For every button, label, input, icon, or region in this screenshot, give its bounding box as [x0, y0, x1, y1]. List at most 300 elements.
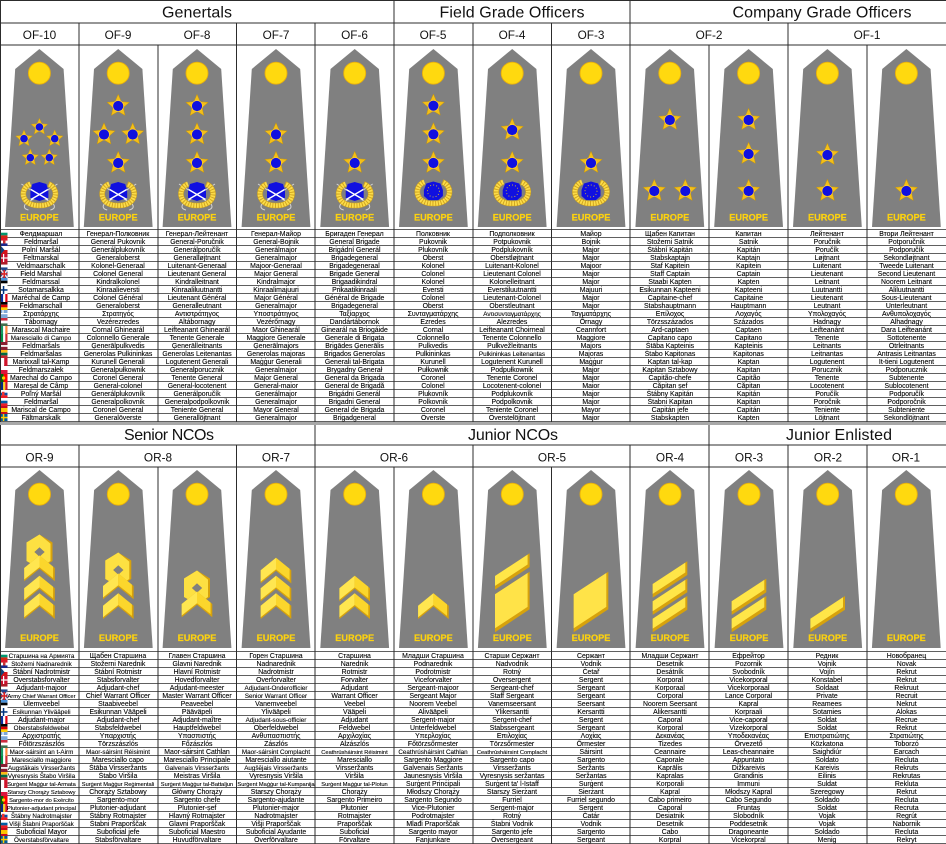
names: OR-8 left: Plutonier-adjudant	[90, 805, 146, 812]
names: OR-9: Army Chief Warrant Officer	[8, 694, 76, 700]
names: OF-2 left: Štábní Kapitán	[647, 245, 693, 254]
names: OF-1 right: Tweede Luitenant	[879, 263, 934, 270]
names: OR-1: Toborzó	[894, 741, 919, 748]
names: OF-6: Brigadni General	[329, 399, 381, 406]
names: OR-7: Ylivääpeli	[261, 709, 291, 716]
names: OR-5 right: Λοχίας	[581, 732, 602, 740]
names: OR-8 right: Υπασπιστής	[178, 733, 217, 740]
names: OF-9: Kurunell Ġenerali	[91, 357, 145, 366]
names: OF-4: Lieutenant-Colonel	[483, 295, 541, 302]
names: OF-2 left: Štabni Kapitan	[648, 397, 693, 406]
names: OF-3: Majuuri	[580, 287, 603, 294]
names: OF-1 left: Leitnants	[813, 343, 842, 350]
names: OF-1 left: Porucznik	[812, 367, 843, 374]
names: OF-10: Veldmaarschalk	[17, 263, 66, 270]
names: OF-10: Feldmaršal	[24, 399, 59, 406]
insignia: OR-5 left: EUROPE	[493, 633, 532, 643]
names: OF-10: Marixxall tal-Kamp	[13, 359, 70, 366]
insignia: OR-4	[636, 470, 704, 648]
names: OF-3: Mayor	[581, 407, 601, 414]
names: OF-10: Fältmarskalk	[21, 415, 61, 422]
insignia: OF-2 right: EUROPE	[729, 212, 768, 222]
names: OF-3: Őrnagy	[580, 317, 603, 326]
names: OF-10: Maréchal de Camp	[12, 295, 70, 302]
names: OF-3: Majoras	[579, 351, 604, 358]
names: OR-3: Kapral	[739, 701, 759, 708]
names: OR-6 right: Sargento Segundo	[404, 797, 462, 804]
names: OF-6: Бригаден Генерал	[325, 231, 384, 238]
heading: Field Grade Officers: Field Grade Officers	[440, 4, 584, 22]
names: OR-6 left: Viršila	[345, 773, 364, 780]
names: OR-9: Surġent Maġġur tal-Armata	[7, 782, 77, 788]
names: OF-1 left: Logutenent	[810, 359, 844, 366]
names: OR-8 left: Štábny Rotmajster	[90, 811, 147, 820]
names: OR-7: Nadrotmistr	[258, 669, 295, 676]
names: OF-7: Kindralmajor	[257, 279, 296, 286]
names: OR-1: Recluta	[895, 757, 918, 764]
names: OR-7: Adjudant-sous-officier	[246, 717, 306, 724]
names: OF-7: Major General	[254, 271, 298, 278]
names: OR-3: Őrvezető	[735, 739, 763, 748]
names: OR-6 left: Virsseržants	[336, 765, 374, 772]
names: OF-8: Tenente Generale	[170, 335, 225, 342]
names: OF-6: Ginearál na Briogáide	[321, 327, 388, 334]
names: OF-9: Colonel General	[93, 271, 143, 278]
rank labels: officers: OF-7	[263, 28, 289, 42]
names: OF-2 right: Százados	[733, 319, 764, 326]
names: OF-2 right: Kapitein	[736, 263, 761, 270]
names: OR-2: Επιστρατιώτης	[804, 732, 850, 740]
names: OF-3: Majors	[581, 343, 602, 350]
names: OF-8: Tenente General	[172, 375, 223, 382]
names: OR-3: Vice-caporal	[729, 717, 768, 724]
insignia: OR-5 right	[557, 470, 625, 648]
names: OR-3: Lance Corporal	[725, 693, 773, 700]
insignia: OF-3	[557, 49, 625, 227]
names: OR-9: Oberstabsfeldwebel	[14, 725, 69, 732]
names: OF-2 right: Λοχαγός	[735, 310, 762, 318]
names: OF-1 right: Podporučík	[889, 391, 924, 398]
names: OR-5 right: Сержант	[577, 653, 606, 660]
names: OF-9: Kolonel-Generaal	[91, 263, 145, 270]
rank labels: officers: OF-5	[420, 28, 447, 42]
names: OR-6 left: Veebel	[344, 701, 366, 708]
names: OF-8: Generolas Leitenantas	[162, 351, 232, 358]
names: OR-5 right: Furriel segundo	[567, 797, 615, 804]
names: OF-3: Major	[582, 415, 600, 422]
names: OF-2 right: Capitão	[737, 375, 761, 382]
names: OR-8 left: Surġent Maġġur Reġimentali	[82, 782, 154, 788]
names: OR-7: Starszy Chorąży	[251, 789, 302, 796]
flags: officers table	[1, 230, 8, 421]
names: OF-2 right: Captain	[737, 271, 761, 278]
insignia: OR-2	[793, 470, 862, 648]
names: OF-6: Brigadegeneral	[331, 303, 378, 310]
names: OF-9: Generaloberst	[96, 255, 140, 262]
names: OF-9: Generalöverste	[94, 415, 142, 422]
names: OR-7: Sargento-ajudante	[248, 797, 305, 804]
names: OR-4: Korporali	[656, 781, 684, 788]
names: OF-3: Majoor	[580, 263, 602, 270]
names: OF-2 right: Satnik	[739, 239, 759, 246]
names: OF-5: Ezredes	[420, 319, 446, 326]
names: OR-4: Desiatnik	[656, 813, 685, 820]
names: OF-2 left: Törzsszázados	[647, 319, 694, 326]
names: OR-3: Ефрейтор	[732, 652, 765, 660]
insignia: OF-5: EUROPE	[414, 212, 453, 222]
names: OR-5 right: Sargento	[577, 757, 605, 764]
names: OF-10: Tábornagy	[25, 319, 58, 326]
names: OF-7: Генерал-Майор	[251, 230, 301, 238]
names: OF-10: Feldmaršal	[24, 239, 59, 246]
names: OF-5: Överste	[421, 414, 445, 422]
names: OF-1 right: Otrleitnants	[889, 343, 925, 350]
names: OR-1: Recruit	[896, 693, 917, 700]
insignia: OR-5 left	[478, 470, 547, 648]
names: OR-8 left: Sargento-mor	[97, 797, 140, 804]
names: OF-7: Generolas majoras	[247, 351, 306, 358]
names: OR-6 left: Rotmistr	[342, 669, 368, 676]
rank labels: officers: OF-3	[578, 28, 605, 42]
heading: Senior NCOs: Senior NCOs	[124, 427, 214, 444]
names: OR-6 left: Alzászlós	[340, 741, 370, 748]
insignia: OR-6 left: EUROPE	[335, 633, 374, 643]
names: OR-1: Recruta	[894, 805, 919, 812]
rank labels: other ranks: OR-6	[380, 450, 409, 464]
names: OF-1 right: Sekondlöjtnant	[884, 415, 929, 422]
names: OR-3: Vicekorporaal	[727, 685, 770, 692]
names: OR-6 right: Podnarednik	[414, 661, 453, 668]
names: OR-6 left: Adjudant	[341, 717, 368, 724]
names: OR-6 left: Adjudant	[341, 685, 368, 692]
names: OR-5 left: Ceathrúsháirsint Complacht	[477, 750, 548, 756]
names: OR-6 left: Sargento Primeiro	[327, 797, 382, 804]
names: OF-7: Maor Ghinearál	[252, 327, 300, 334]
names: OF-7: Generalmajor	[255, 303, 298, 310]
names: OF-10: Sotamarsalkka	[18, 287, 64, 294]
insignia: OF-3: EUROPE	[572, 212, 610, 222]
names: OF-6: Ġenerali tal-Brigata	[325, 357, 384, 366]
rank labels: officers: OF-4	[499, 28, 526, 42]
names: OF-2 left: Kapitan Sztabowy	[642, 367, 698, 374]
names: OF-1 left: Locotenent	[810, 383, 844, 390]
names: OR-8 left: Törzszászlós	[98, 741, 139, 748]
names: OR-1: Recluta	[895, 829, 918, 836]
names: OR-2: Vojak	[819, 821, 836, 828]
names: OR-6 left: Förvaltare	[339, 837, 370, 844]
insignia: OR-7: EUROPE	[257, 633, 295, 643]
names: OR-7: Nadrotmajster	[254, 813, 298, 820]
names: OR-8 right: Główny Chorąży	[172, 789, 223, 796]
rank labels: other ranks: OR-1	[892, 450, 920, 464]
names: OF-2 left: Kaptan tal-kap	[648, 359, 692, 366]
names: OF-1 left: Lieutenant	[811, 295, 843, 302]
names: OR-8 left: Chorąży Sztabowy	[89, 789, 147, 796]
names: OR-5 left: Rotný	[503, 669, 522, 676]
names: OR-5 right: Vodnik	[581, 821, 602, 828]
names: OF-5: Pulkininkas	[416, 351, 451, 358]
names: OR-6 right: Mlađi Praporščak	[406, 821, 460, 828]
names: OR-3: Cabo Segundo	[726, 797, 772, 804]
names: OF-10: Maresciallo di Campo	[11, 335, 72, 342]
names: OR-5 right: Sergeant	[577, 725, 605, 732]
names: OR-7: Suboficial Ayudante	[246, 829, 306, 836]
names: OR-4: Cabo primeiro	[648, 797, 692, 804]
names: OF-4: Podplukovník	[491, 391, 533, 398]
names: OF-2 right: Kaptan	[738, 359, 760, 366]
names: OF-3: Maggiore	[577, 335, 606, 342]
names: OR-6 right: Unterfeldwebel	[410, 725, 456, 732]
names: OR-8 left: Chief Warrant Officer	[86, 693, 151, 700]
names: OF-10: Poľný Maršál	[21, 391, 62, 398]
names: OR-8 right: Glavni Praporščak	[169, 821, 226, 828]
names: OF-9: Coronel General	[93, 375, 144, 382]
names: OR-8 right: Maor-sáirsint Cathlan	[164, 749, 230, 756]
names: OR-5 left: Starszy Sierżant	[487, 789, 537, 796]
names: OR-5 left: Ylikersantti	[495, 709, 529, 716]
names: OR-7: Горен Старшина	[249, 653, 303, 660]
names: OR-4: Corporal	[657, 693, 684, 700]
names: OR-3: Młodszy Kapral	[725, 789, 773, 796]
names: OF-2 right: Capitán	[737, 407, 761, 414]
rank labels: other ranks: OR-2	[814, 450, 842, 464]
names: OR-5 right: Sergent	[579, 805, 603, 812]
names: OR-8 left: Maor-sáirsint Réisimint	[86, 749, 150, 756]
names: OR-3: Vizekorporal	[729, 725, 768, 732]
names: OF-6: General da Brigada	[325, 375, 385, 382]
names: OR-1: Earcach	[894, 749, 919, 756]
names: OR-5 left: Vanemseersant	[488, 701, 536, 708]
names: OR-9: Főtörzszászlós	[19, 741, 65, 748]
names: OF-7: Generálmajor	[255, 391, 298, 398]
names: OF-1 right: It-tieni Logutenent	[879, 359, 934, 366]
names: OR-4: Korporal	[657, 725, 683, 732]
names: OF-6: Brigade General	[329, 271, 380, 278]
names: OR-8 right: Surġent Maġġur tal-Battaljun	[161, 782, 233, 788]
names: OR-6 right: Noorem Veebel	[409, 701, 457, 708]
names: OR-8 left: Suboficial jefe	[97, 829, 140, 836]
names: OF-5: Pulkvedis	[418, 343, 448, 350]
names: OR-7: Surġent Maġġur tal-Kumpanija	[237, 782, 315, 788]
names: OF-1 left: Løjtnant	[815, 255, 840, 262]
insignia: OR-1: EUROPE	[887, 633, 926, 643]
names: OF-10: Marechal do Campo	[10, 375, 72, 382]
names: OR-9: Plutonier-adjudant principal	[7, 806, 76, 812]
names: OF-1 right: Втори Лейтенант	[879, 230, 935, 238]
insignia: OF-4: EUROPE	[493, 212, 532, 222]
names: OF-3: Bojnik	[582, 239, 601, 246]
rank labels: other ranks: OR-7	[262, 450, 290, 464]
names: OR-1: Rekryt	[897, 837, 917, 844]
names: OR-6 right: Sergeant Major	[409, 693, 457, 700]
names: OR-2: Konstabel	[812, 677, 843, 684]
insignia: OR-9: EUROPE	[20, 633, 59, 643]
insignia: OR-9	[5, 470, 74, 648]
insignia: OR-8 right	[163, 470, 231, 648]
names: OF-3: Major	[582, 247, 600, 254]
names: OR-8 left: Staabiveebel	[98, 701, 138, 708]
names: OF-6: Général de Brigade	[325, 295, 385, 302]
names: OF-4: Pulkininkas Leitenantas	[479, 351, 545, 358]
names: OR-9: Αρχιστρατής	[22, 733, 61, 740]
rank labels: officers: OF-6	[341, 28, 368, 42]
names: OR-4: Kapral	[660, 789, 680, 796]
names: OF-1 left: Poročnik	[814, 399, 841, 406]
names: OF-8: Генерал-Лейтенант	[166, 230, 229, 238]
names: OF-5: Συνταγματάρχης	[408, 310, 459, 318]
names: OR-7: Ανθυπασπιστής	[252, 733, 301, 740]
names: OF-2 left: Štabo Kapitonas	[645, 349, 696, 358]
names: OF-2 left: Capitán jefe	[652, 407, 689, 414]
names: OR-1: Alokas	[896, 709, 917, 716]
names: OR-7: Vyresnysis Viršila	[249, 773, 303, 780]
names: OF-2 right: Kapten	[738, 415, 760, 422]
names: OR-1: Regrút	[896, 813, 917, 820]
names: OF-6: Generale di Brigata	[325, 335, 384, 342]
names: OR-2: Soldado	[814, 829, 840, 836]
names: OR-8 left: Υπαρχιστής	[100, 733, 137, 740]
names: OR-5 right: Sargento	[577, 829, 605, 836]
insignia: OR-7	[242, 470, 310, 648]
names: OF-8: Logutenent Ġenerali	[166, 357, 229, 366]
names: OF-9: Kinraalieversti	[96, 287, 140, 294]
names: OF-6: Brigadegeneral	[331, 255, 378, 262]
rank labels: other ranks: OR-5	[538, 450, 567, 464]
names: OF-1 left: Lieutenant	[811, 271, 843, 278]
names: OF-6: Brygadny Generał	[327, 367, 383, 374]
names: OR-6 right: Fanjunkare	[416, 837, 450, 844]
names: OR-2: Soldat	[817, 725, 837, 732]
names: OR-4: Cabo	[662, 829, 678, 836]
names: OF-5: Kolonel	[422, 263, 445, 270]
names: OF-1 left: Hadnagy	[813, 319, 841, 326]
insignia: OF-1 left: EUROPE	[808, 212, 847, 222]
heading: Junior Enlisted: Junior Enlisted	[786, 427, 892, 444]
names: OF-2 left: Stabskaptajn	[650, 255, 690, 262]
names: OF-2 left: Esikunnan Kapteeni	[639, 287, 701, 294]
names: OF-10: Feldmarschall	[20, 303, 63, 310]
names: OF-2 right: Căpitan	[737, 383, 761, 390]
names: OF-4: Potpukovnik	[493, 239, 531, 246]
names: OF-8: Luitenant-Generaal	[168, 263, 227, 270]
names: OF-9: Generalpułkownik	[91, 367, 146, 374]
names: OF-6: Brigadegeneraal	[329, 263, 380, 270]
names: OF-4: Lieutenant Colonel	[483, 271, 541, 278]
names: OR-6 left: Vääpeli	[343, 709, 366, 716]
names: OF-3: Майор	[580, 230, 602, 238]
names: OR-5 left: Sergeant-chef	[490, 685, 534, 692]
names: OF-7: Mayor General	[253, 407, 299, 414]
names: OF-1 left: Leutnant	[814, 303, 840, 310]
names: OR-4: Korporaal	[655, 685, 685, 692]
names: OR-7: Višji Praporščak	[251, 821, 301, 828]
names: OF-7: Generálmajor	[255, 247, 298, 254]
names: OR-5 left: Furriel	[502, 797, 522, 804]
names: OR-6 left: Maresciallo	[337, 757, 372, 764]
names: OR-5 left: Oversergent	[493, 677, 531, 684]
names: OF-8: Kindralleitnant	[175, 279, 219, 286]
names: OF-1 right: Subteniente	[888, 407, 925, 414]
names: OF-7: Vezérőrnagy	[257, 319, 296, 326]
names: OR-8 right: Huvudförvaltare	[173, 837, 221, 844]
names: OF-1 left: Luitenant	[813, 263, 841, 270]
names: OR-3: Leas-cheannaire	[723, 749, 774, 756]
heading: Company Grade Officers: Company Grade Officers	[732, 4, 912, 22]
names: OR-1: Recrue	[895, 717, 918, 724]
names: OR-2: Soldaat	[815, 685, 839, 692]
names: OR-6 right: Viceforvalter	[414, 677, 453, 684]
names: OR-8 right: Glavni Narednik	[172, 661, 222, 668]
names: OF-9: Ģenerālpulkvedis	[91, 343, 145, 350]
names: OR-5 left: Staff Sergeant	[490, 693, 534, 700]
names: OF-5: Cornal	[423, 327, 444, 334]
names: OF-2 left: Staabi Kapten	[648, 279, 692, 286]
names: OF-2 left: Capitaine-chef	[648, 295, 692, 302]
names: OR-6 left: Feldwebel	[339, 725, 371, 732]
names: OR-8 left: Štāba Virsseržants	[89, 763, 147, 772]
names: OR-5 left: Sargento jefe	[492, 829, 533, 836]
names: OF-1 left: Leitnant	[815, 279, 839, 286]
names: OR-6 left: Plutonier	[341, 805, 369, 812]
insignia: OF-1 right: EUROPE	[887, 212, 926, 222]
names: OR-1: Rekrutas	[893, 773, 921, 780]
names: OR-1: Στρατιώτης	[890, 732, 924, 740]
names: OR-7: Maresciallo aiutante	[245, 757, 307, 764]
insignia: OR-4: EUROPE	[651, 633, 689, 643]
names: OR-9: Starszy Chorąży Sztabowy	[8, 790, 76, 796]
names: OF-8: Αντιστράτηγος	[175, 310, 220, 318]
insignia: OF-10	[5, 49, 74, 227]
names: OF-8: Leifteanant Ghinearál	[164, 327, 230, 334]
names: OR-6 right: Jaunesnysis Viršila	[404, 773, 462, 780]
names: OF-9: Vezérezredes	[97, 319, 140, 326]
insignia: OF-8: EUROPE	[178, 212, 216, 222]
names: OF-1 right: Aliluutnantti	[889, 287, 925, 294]
insignia: OF-10: EUROPE	[20, 212, 59, 222]
insignia: OF-7: EUROPE	[257, 212, 295, 222]
rank labels: other ranks	[25, 450, 920, 464]
names: OF-1 right: Second Lieutenant	[878, 271, 935, 278]
names: OR-8 right: Peaveebel	[181, 701, 214, 708]
names: OR-6 right: Młodszy Chorąży	[407, 789, 460, 796]
names: OR-3: Pozornik	[735, 661, 762, 668]
names: OR-6 left: Chorąży	[342, 789, 368, 796]
insignia: OR-8 left	[84, 470, 153, 648]
names: OR-8 right: Master Warrant Officer	[162, 693, 232, 700]
names: OR-5 right: Sergent	[579, 717, 603, 724]
names: OR-5 right: Četař	[583, 667, 600, 676]
rank labels: other ranks: OR-4	[656, 450, 685, 464]
names: OR-5 left: Sergent-chef	[492, 717, 532, 724]
names: OF-1 left: Poručík	[815, 247, 839, 254]
names: OF-8: Altábornagy	[179, 319, 216, 326]
names: OF-1 right: Sublocotenent	[884, 383, 929, 390]
names: OF-4: Podpułkownik	[491, 367, 534, 374]
names: OF-6: General de Brigadă	[325, 383, 385, 390]
insignia: OF-5	[399, 49, 468, 227]
names: OF-10: Feltmarskal	[23, 255, 59, 262]
names: OR-9: Ülemveebel	[23, 700, 60, 708]
names: OR-6 right: Sargento mayor	[408, 829, 458, 836]
names: OF-7: General-maior	[254, 383, 299, 390]
names: OR-5 right: Sáirsint	[580, 749, 603, 756]
names: OR-6 left: Αρχιλοχίας	[338, 732, 372, 740]
rank labels: officers: OF-8	[184, 28, 211, 42]
names: OF-1 right: Noorem Leitnant	[881, 279, 932, 286]
names: OR-5 right: Seržants	[577, 765, 605, 772]
names: OF-7: Maggiore Generale	[246, 335, 306, 342]
names: OR-2: Eilinis	[818, 773, 837, 780]
